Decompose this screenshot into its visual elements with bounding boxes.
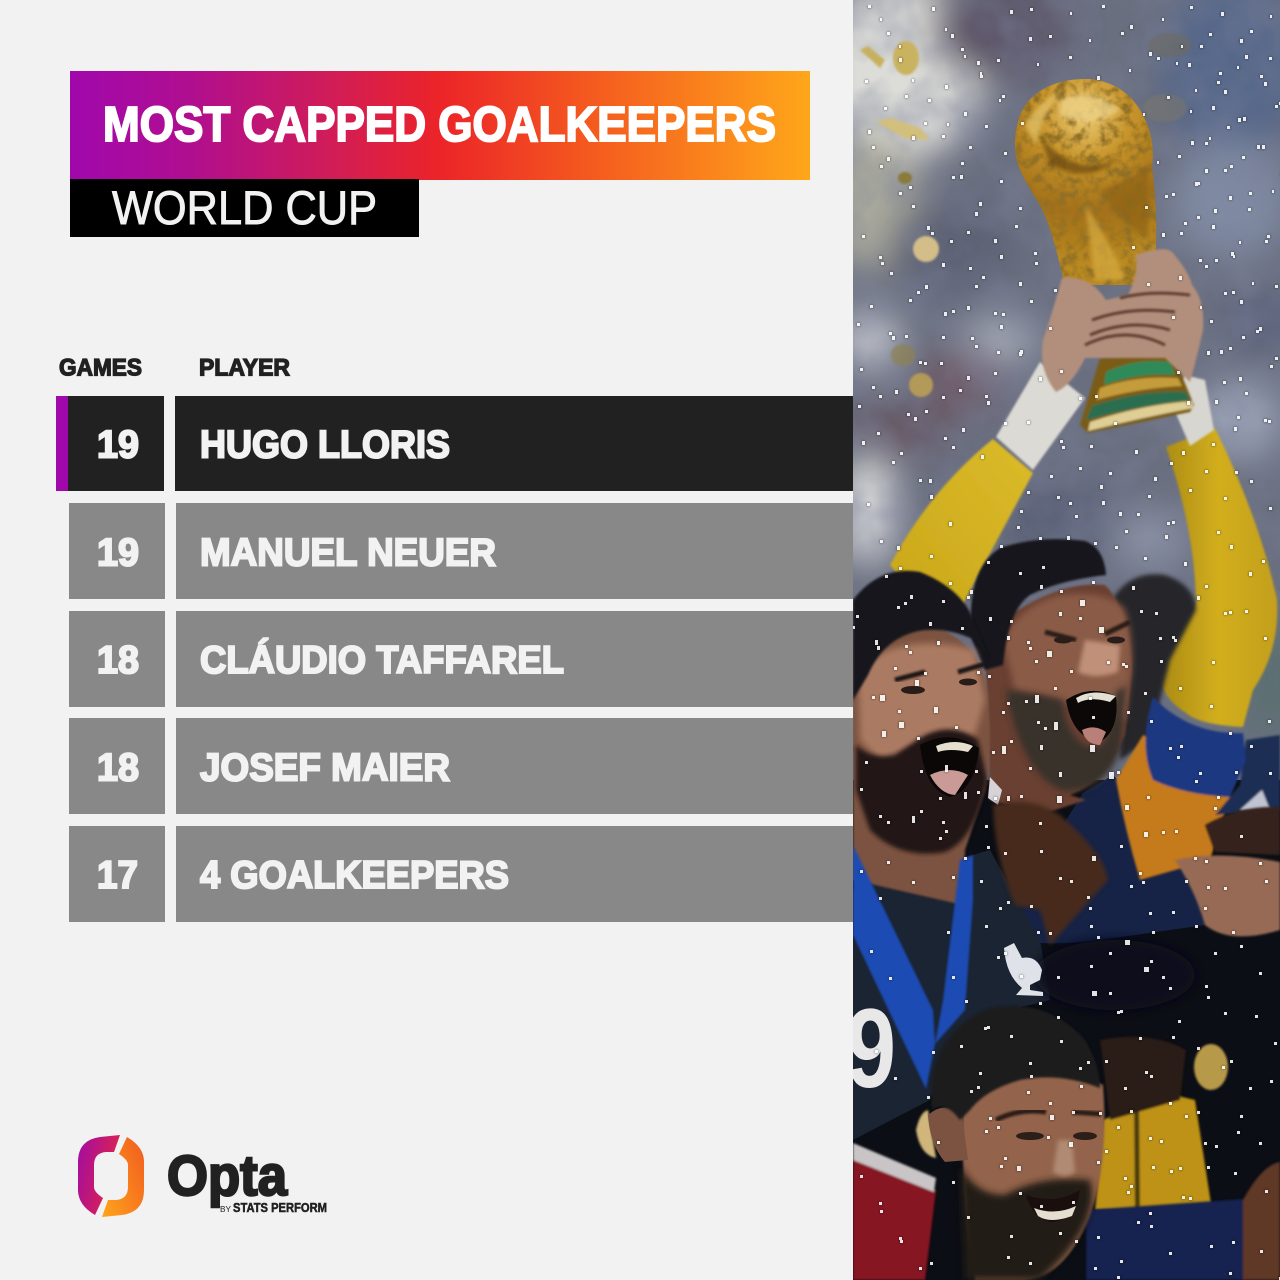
table row 3: Claudio Taffarel: 18 — [97, 639, 139, 682]
photo: trophy base — [1080, 352, 1194, 433]
table row 4: Josef Maier — [69, 718, 853, 814]
Opta logo: BY — [220, 1205, 232, 1214]
column header: games: GAMES — [59, 354, 142, 382]
photo: white wrist wraps — [996, 362, 1214, 470]
table row 1: Hugo Lloris — [56, 396, 853, 491]
table row 2: Manuel Neuer: 19 — [97, 532, 139, 574]
table row 1: Hugo Lloris: 19 — [97, 424, 139, 466]
table row 5: 4 goalkeepers: 4 GOALKEEPERS — [200, 854, 509, 897]
table row 2: Manuel Neuer — [69, 503, 853, 599]
photo: teammate's hand at right — [1175, 855, 1280, 936]
table row 4: Josef Maier: 18 — [97, 746, 139, 790]
title banner: MOST CAPPED GOALKEEPERS — [103, 98, 776, 152]
Opta logo: STATS PERFORM — [233, 1201, 327, 1215]
photo: hands gripping the trophy — [1042, 249, 1203, 392]
table row 2: Manuel Neuer: MANUEL NEUER — [200, 532, 496, 574]
photo: yellow shirt and gold medal — [1095, 1037, 1228, 1210]
photo: shirt number: 9 — [846, 986, 896, 1111]
photo panel: France lifting the World Cup trophy — [846, 0, 1280, 1280]
photo: left yellow sleeve — [890, 439, 1033, 604]
photo: Olivier Giroud — [853, 571, 1002, 905]
photo: red shorts and white flag strip — [853, 1110, 936, 1280]
photo: gold confetti bokeh — [860, 33, 1192, 397]
subtitle: World Cup: WORLD CUP — [112, 181, 377, 234]
photo: blue sleeve and arm at bottom — [1086, 1162, 1280, 1280]
table row 5: 4 goalkeepers — [69, 826, 853, 922]
table row 3: Claudio Taffarel — [69, 611, 853, 707]
column header: player: PLAYER — [199, 354, 290, 382]
table row 1: Hugo Lloris: HUGO LLORIS — [200, 424, 450, 466]
photo: right yellow sleeve — [1160, 428, 1277, 727]
photo: water droplets — [823, 5, 1280, 1280]
photo: World Cup trophy — [1015, 79, 1156, 285]
photo: medal ribbon — [853, 845, 973, 1089]
photo: Hugo Lloris — [971, 539, 1132, 815]
photo: blurred stadium background — [815, 0, 1280, 800]
page background — [0, 0, 853, 1280]
photo: dark forearm at right — [1205, 807, 1280, 855]
photo: dark jersey mass and lower shadows — [853, 775, 1280, 1280]
table row 5: 4 goalkeepers: 17 — [97, 854, 138, 897]
Opta logo — [78, 1135, 327, 1217]
table row 4: Josef Maier: JOSEF MAIER — [200, 746, 450, 790]
photo: orange goalkeeper jersey and blue cuff — [1116, 697, 1280, 880]
photo: dark player behind Lloris — [1112, 574, 1196, 760]
Opta logo: Opta — [167, 1144, 288, 1208]
table row 3: Claudio Taffarel: CLÁUDIO TAFFAREL — [200, 638, 564, 682]
photo: Nabil Fekir — [928, 1006, 1104, 1280]
photo: France rooster crest — [1004, 943, 1043, 996]
title banner — [70, 71, 810, 180]
photo: brown hand on shoulder — [993, 802, 1108, 945]
